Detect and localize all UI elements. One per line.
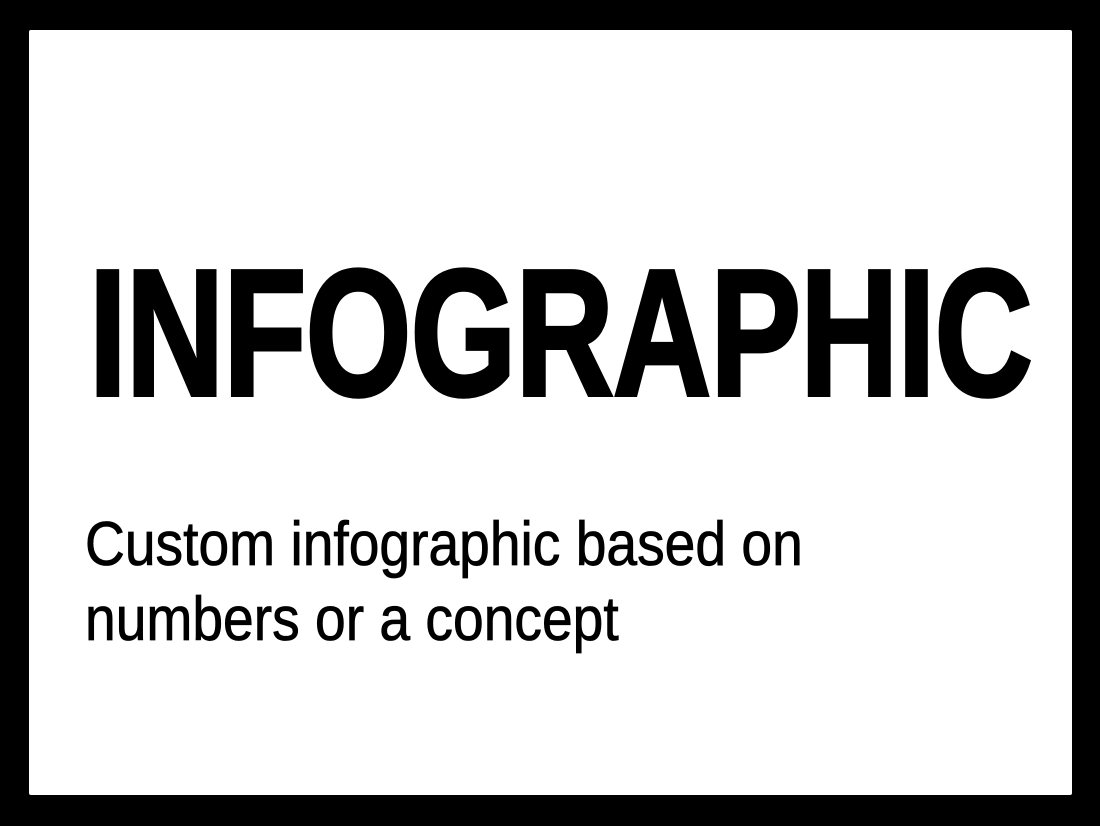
subtitle text block: numbers or a concept (85, 585, 619, 654)
title: INFOGRAPHIC (89, 233, 1032, 434)
subtitle text block (85, 510, 803, 654)
subtitle text block: Custom infographic based on (85, 510, 803, 579)
